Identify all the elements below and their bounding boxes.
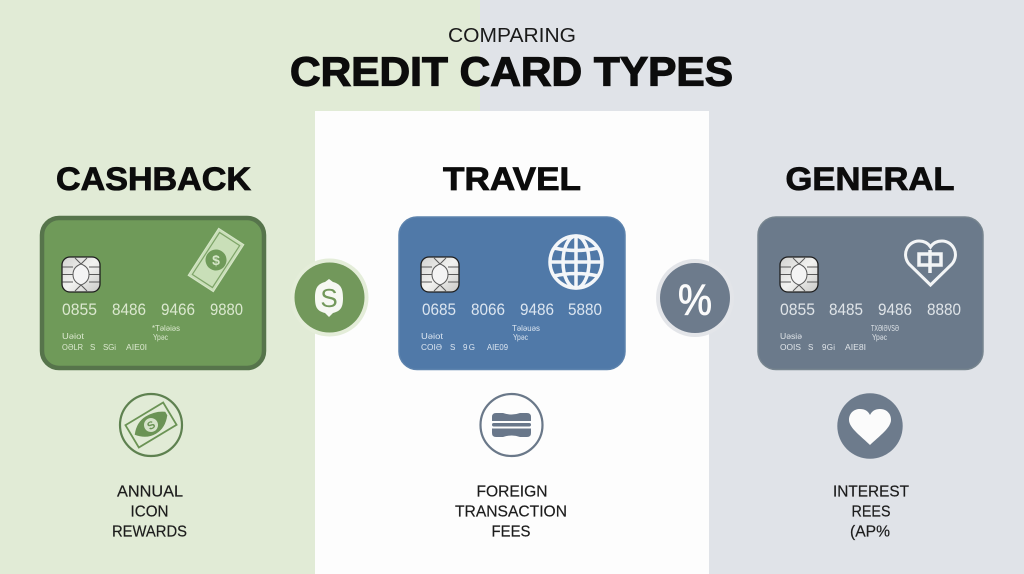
- card number: 8880: [927, 300, 961, 319]
- background: grey column: [709, 111, 1024, 574]
- title: COMPARING: [448, 25, 576, 47]
- background: grey right side: [480, 0, 1024, 111]
- card number: 0855: [780, 300, 815, 319]
- heading: travel: TRAVEL: [443, 161, 581, 197]
- icon: globe: [550, 236, 602, 288]
- icon: banknote: $: [212, 252, 220, 268]
- card number: 8486: [112, 300, 146, 319]
- card details: 9G: [463, 343, 475, 352]
- card details: OOIS: [780, 343, 801, 352]
- heading: cashback: CASHBACK: [56, 161, 251, 197]
- card details: S: [450, 343, 455, 352]
- heading: general: GENERAL: [786, 161, 954, 197]
- label: annual icon rewards: [112, 484, 187, 540]
- panel: travel card: [399, 217, 625, 370]
- connector badge: dollar: [290, 258, 368, 336]
- label: foreign transaction fees: TRANSACTION: [455, 504, 567, 520]
- card details: OƏLR: [62, 343, 83, 352]
- label: interest rees: INTEREST: [833, 484, 909, 500]
- card number: 0685: [422, 300, 456, 319]
- label: annual icon rewards: REWARDS: [112, 524, 187, 540]
- card details: [780, 324, 899, 352]
- card details: Uəsiə: [780, 332, 803, 341]
- card details: Ypəc: [513, 333, 528, 342]
- card details: AIE8I: [845, 343, 866, 352]
- card details: [62, 324, 180, 352]
- panel: travel white column: [315, 111, 709, 574]
- icon: card chip: [780, 257, 818, 292]
- card details: COIƏ: [421, 343, 442, 352]
- card details: [421, 324, 540, 352]
- card details: Uəiot: [421, 332, 444, 341]
- icon: card chip: [62, 257, 100, 292]
- title: [290, 25, 733, 94]
- label: interest rees: [833, 484, 909, 540]
- card number: [62, 300, 243, 319]
- title: CREDIT CARD TYPES: [290, 48, 733, 94]
- label: foreign transaction fees: FOREIGN: [476, 484, 548, 500]
- card number: 9486: [520, 300, 554, 319]
- label: annual icon rewards: ICON: [130, 504, 168, 520]
- icon: annual rewards banknote: [120, 394, 182, 456]
- card details: Ypəc: [872, 333, 887, 342]
- card number: 0855: [62, 300, 97, 319]
- label: foreign transaction fees: FEES: [492, 524, 530, 540]
- icon: foreign transaction fees: [480, 394, 542, 456]
- card details: Ypəc: [153, 333, 168, 342]
- background: green left side: [0, 0, 480, 111]
- panel: general card: [758, 217, 983, 370]
- card details: 9Gi: [822, 343, 835, 352]
- card number: 8485: [829, 300, 863, 319]
- label: foreign transaction fees: [455, 484, 567, 540]
- icon: banknote: [188, 228, 244, 292]
- card details: Uəiot: [62, 332, 85, 341]
- card details: *Tələiəs: [152, 324, 180, 333]
- icon: interest heart: [837, 393, 903, 459]
- connector badge: percent: [656, 259, 734, 337]
- connector badge: dollar: S: [320, 283, 338, 313]
- card details: AIE0I: [126, 343, 147, 352]
- background: green column: [0, 111, 315, 574]
- card number: 9880: [210, 300, 243, 319]
- card number: [422, 300, 602, 319]
- panel: cashback card: [42, 218, 264, 368]
- card details: S: [808, 343, 813, 352]
- card number: 9466: [161, 300, 195, 319]
- card details: SGi: [103, 343, 116, 352]
- card number: 9486: [878, 300, 912, 319]
- card number: [780, 300, 961, 319]
- card details: AIE09: [487, 343, 509, 352]
- label: interest rees: REES: [852, 504, 890, 520]
- card number: 5880: [568, 300, 602, 319]
- icon: card chip: [421, 257, 459, 292]
- connector badge: percent: %: [678, 276, 712, 324]
- card number: 8066: [471, 300, 505, 319]
- label: interest rees: (AP%: [850, 524, 890, 540]
- icon: heart outline: [906, 241, 955, 285]
- card details: TXƏIƏVSƏ: [871, 324, 899, 333]
- label: annual icon rewards: ANNUAL: [117, 484, 183, 500]
- card details: Tələuəs: [512, 324, 540, 333]
- card details: S: [90, 343, 95, 352]
- icon: annual rewards banknote: S: [145, 419, 158, 433]
